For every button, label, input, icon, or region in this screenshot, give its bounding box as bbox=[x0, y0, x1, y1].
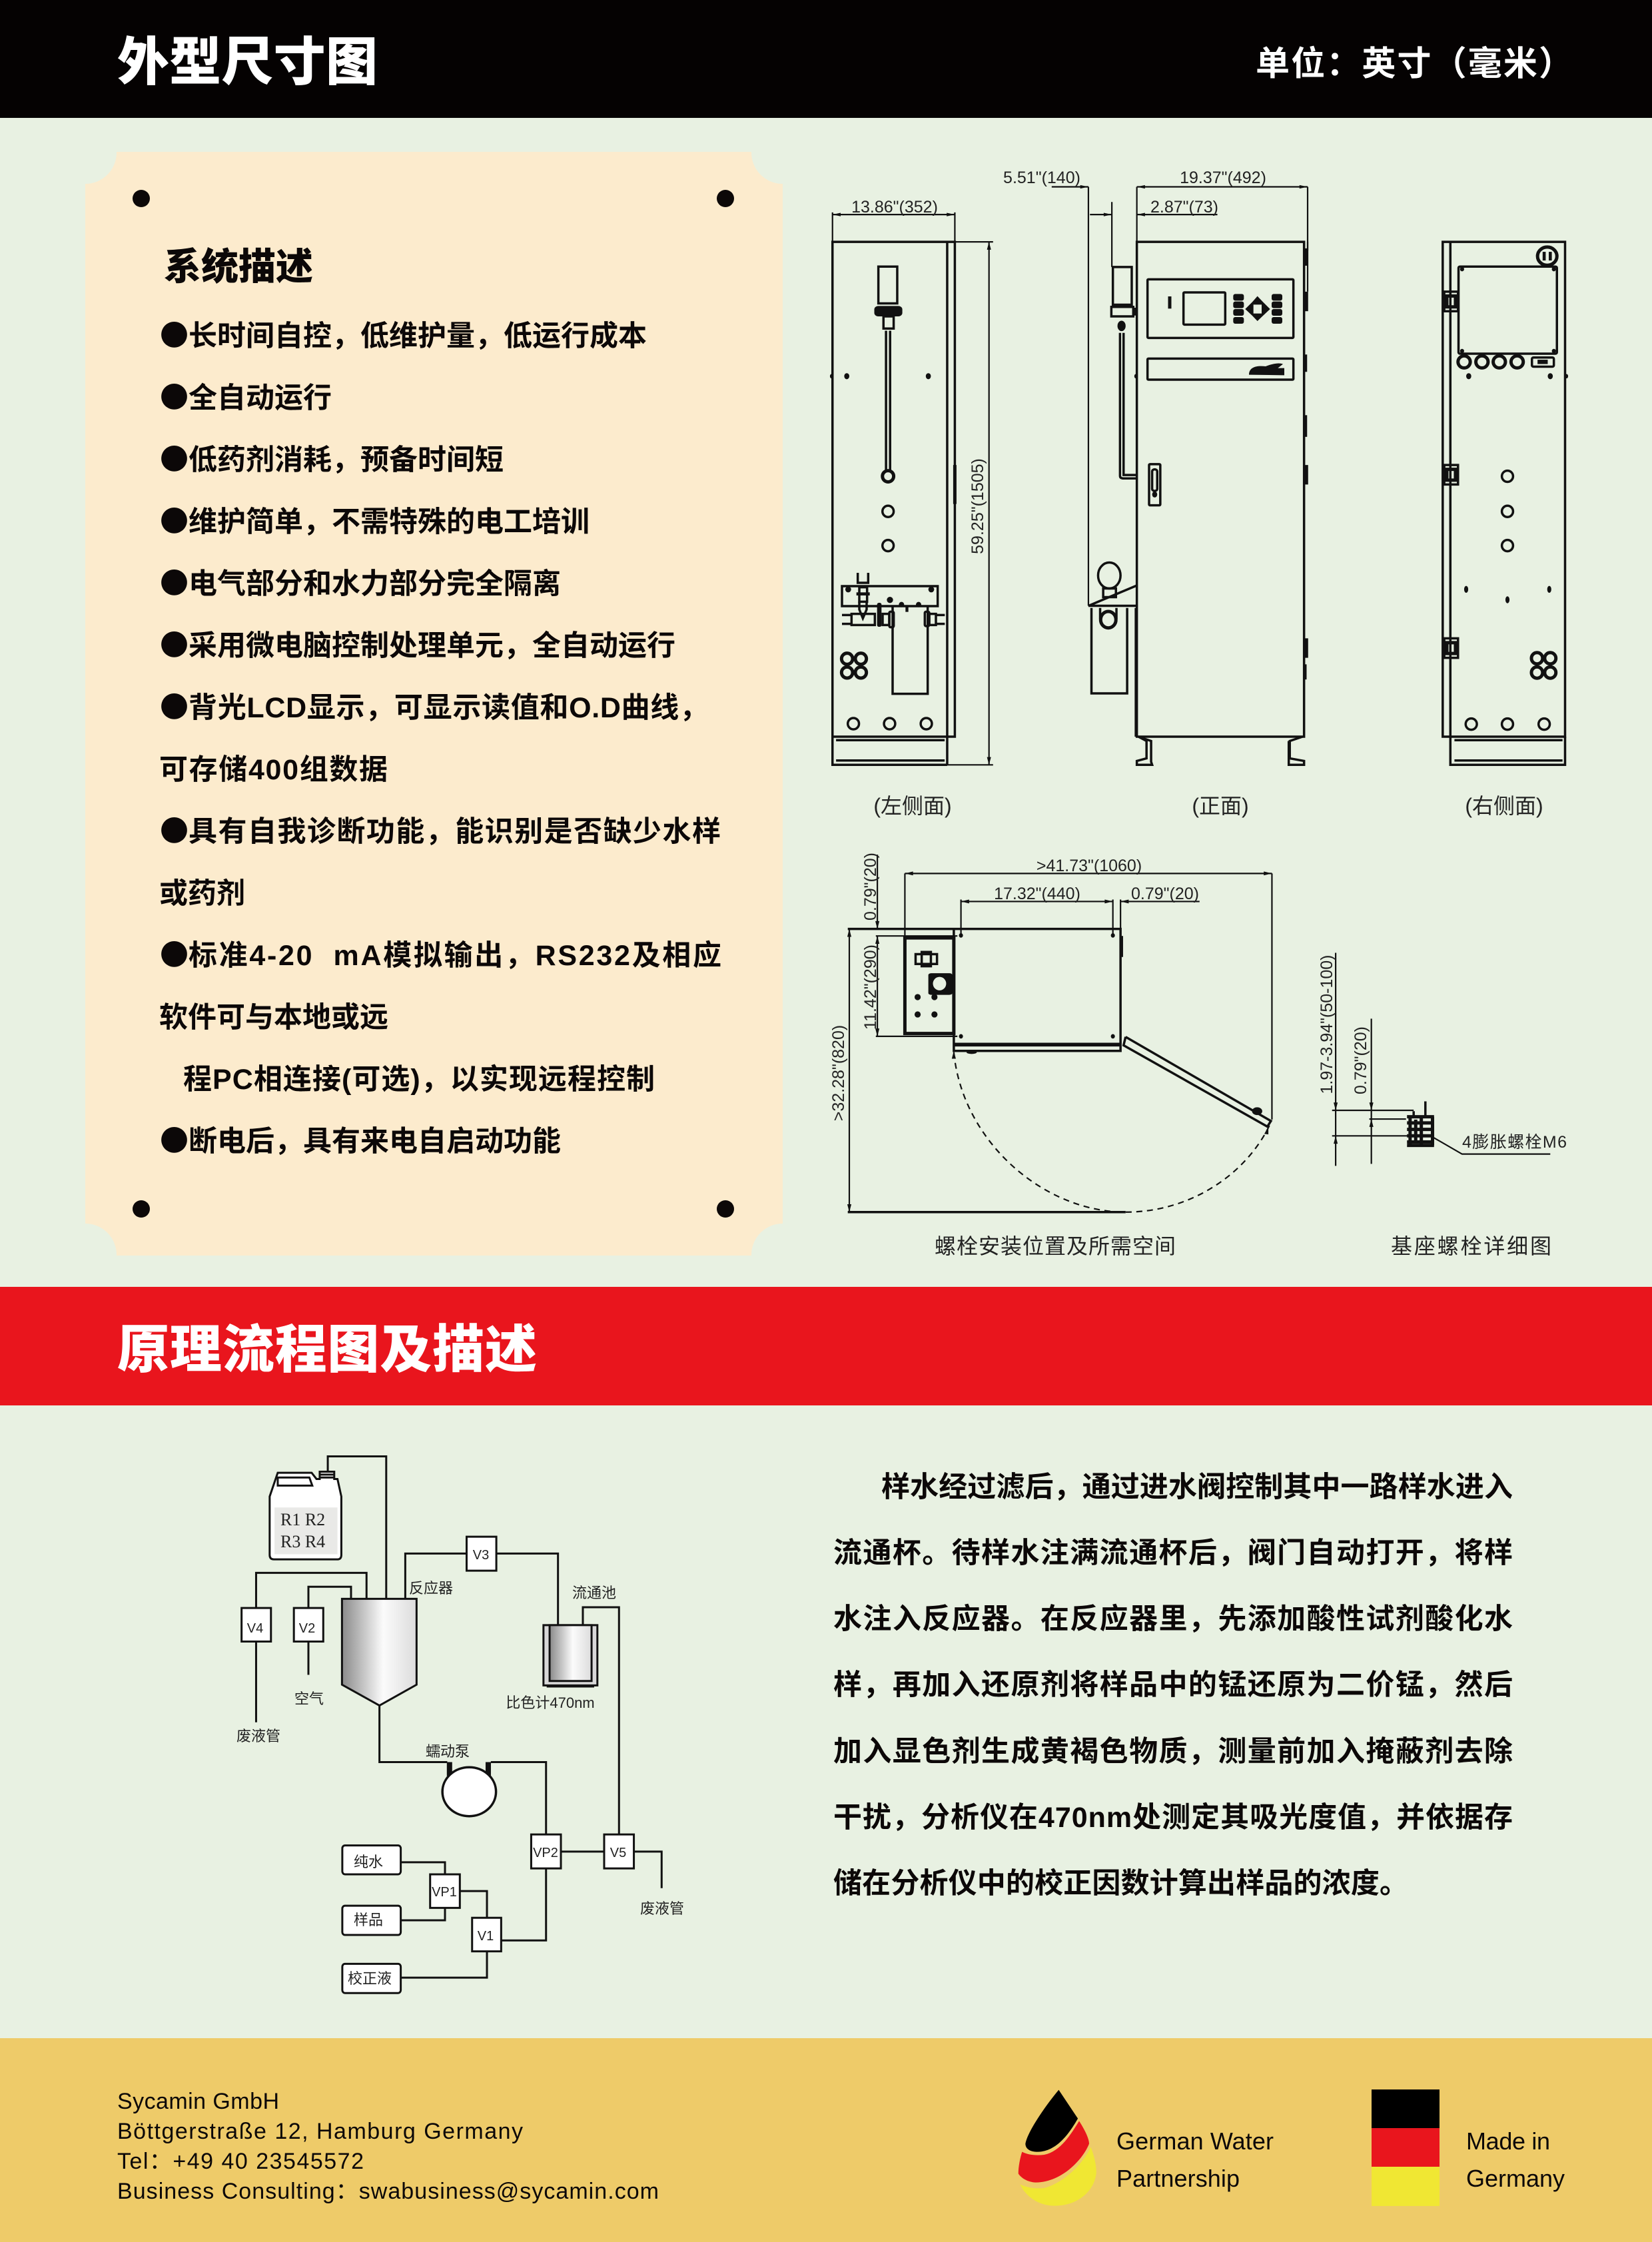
partnership label bbox=[1116, 2127, 1274, 2192]
component labels: 流通池 bbox=[572, 1585, 616, 1601]
caption: left view: (左侧面) bbox=[873, 794, 952, 818]
component labels: 空气 bbox=[294, 1690, 324, 1707]
valve labels: V1 bbox=[478, 1929, 494, 1944]
valve labels: VP1 bbox=[432, 1885, 457, 1900]
principle description text: 样，再加入还原剂将样品中的锰还原为二价锰，然后 bbox=[833, 1669, 1513, 1701]
panel heading: 系统描述 bbox=[164, 246, 313, 288]
drawing: front view bbox=[1003, 169, 1308, 818]
feature list: 全自动运行 bbox=[189, 382, 332, 414]
principle description text bbox=[833, 1471, 1513, 1900]
feature list: 维护简单，不需特殊的电工培训 bbox=[189, 506, 590, 538]
principle description text: 加入显色剂生成黄褐色物质，测量前加入掩蔽剂去除 bbox=[833, 1736, 1513, 1768]
caption: right view: (右侧面) bbox=[1465, 794, 1543, 818]
component labels: 纯水 bbox=[354, 1854, 383, 1870]
feature list: 长时间自控，低维护量，低运行成本 bbox=[189, 320, 647, 352]
feature list: ● bbox=[160, 437, 189, 478]
icon: reactor tank bbox=[342, 1599, 416, 1706]
component labels: 废液管 bbox=[640, 1900, 684, 1917]
component labels bbox=[236, 1580, 684, 1987]
feature list: 程PC相连接(可选)，以实现远程控制 bbox=[183, 1064, 655, 1096]
feature list: ● bbox=[160, 933, 189, 974]
company contact details: Tel：+49 40 23545572 bbox=[117, 2149, 364, 2174]
partnership label: Partnership bbox=[1116, 2165, 1240, 2192]
made in Germany label: Made in bbox=[1466, 2127, 1550, 2155]
feature list: 采用微电脑控制处理单元，全自动运行 bbox=[189, 630, 675, 662]
footer bbox=[0, 2038, 1652, 2242]
feature list: 标准4-20 mA模拟输出，RS232及相应 bbox=[189, 940, 721, 972]
valve labels: VP2 bbox=[533, 1846, 558, 1860]
component labels: 反应器 bbox=[409, 1580, 453, 1597]
icon: flow cell bbox=[544, 1625, 598, 1686]
company contact details bbox=[117, 2089, 659, 2204]
dimension: 0.79 horizontal: 0.79"(20) bbox=[1131, 885, 1199, 903]
dimension: 19.37: 19.37"(492) bbox=[1180, 169, 1266, 187]
feature list: ● bbox=[160, 375, 189, 416]
valve labels: V3 bbox=[473, 1548, 489, 1563]
dimension: height: 59.25"(1505) bbox=[969, 458, 987, 554]
principle description text: 储在分析仪中的校正因数计算出样品的浓度。 bbox=[833, 1868, 1408, 1900]
dimension: 17.32: 17.32"(440) bbox=[994, 885, 1080, 903]
component labels: 样品 bbox=[354, 1912, 383, 1928]
component labels: 校正液 bbox=[348, 1970, 392, 1987]
caption: bolt positions: 螺栓安装位置及所需空间 bbox=[935, 1234, 1176, 1258]
feature list: ● bbox=[160, 809, 189, 850]
component labels: 蠕动泵 bbox=[426, 1743, 470, 1760]
feature list: 背光LCD显示，可显示读值和O.D曲线， bbox=[189, 692, 708, 724]
company contact details: Business Consulting：swabusiness@sycamin.com bbox=[117, 2179, 659, 2204]
canister labels: R1 R2 bbox=[280, 1510, 325, 1529]
drawing: bolt positions and required space bbox=[829, 853, 1272, 1258]
section title: 原理流程图及描述 bbox=[117, 1320, 537, 1379]
drawing: right side view bbox=[1443, 242, 1568, 818]
dimension: 32.28: >32.28"(820) bbox=[829, 1025, 848, 1121]
feature list: 低药剂消耗，预备时间短 bbox=[189, 444, 504, 476]
caption: front view: (正面) bbox=[1192, 794, 1249, 818]
dimension: 11.42: 11.42"(290) bbox=[861, 944, 880, 1030]
valve labels: V4 bbox=[247, 1621, 263, 1636]
icon: water drop logo bbox=[1019, 2090, 1096, 2206]
dimension: 0.79 detail: 0.79"(20) bbox=[1352, 1026, 1370, 1094]
manifold and sample cup bbox=[841, 573, 945, 694]
dimension: 5.51: 5.51"(140) bbox=[1003, 169, 1080, 187]
feature list: ● bbox=[160, 313, 189, 354]
valves bbox=[242, 1537, 634, 1993]
company contact details: Böttgerstraße 12, Hamburg Germany bbox=[117, 2119, 523, 2144]
feature list: 可存储400组数据 bbox=[159, 754, 388, 786]
header band: dimensions bbox=[0, 0, 1652, 118]
made in Germany label: Germany bbox=[1466, 2165, 1565, 2192]
feature list: ● bbox=[160, 623, 189, 664]
principle description text: 水注入反应器。在反应器里，先添加酸性试剂酸化水 bbox=[833, 1603, 1513, 1635]
flow chart bbox=[236, 1456, 684, 1993]
feature list: 软件可与本地或远 bbox=[159, 1002, 388, 1034]
principle description text: 干扰，分析仪在470nm处测定其吸光度值，并依据存 bbox=[833, 1802, 1513, 1834]
icon: German flag bbox=[1372, 2089, 1440, 2206]
valve labels bbox=[247, 1548, 626, 1944]
flow chart: R3 R4 bbox=[280, 1532, 325, 1551]
icon: peristaltic pump bbox=[442, 1762, 496, 1816]
drawing: left side view bbox=[830, 198, 993, 818]
company contact details: Sycamin GmbH bbox=[117, 2089, 279, 2114]
feature list bbox=[159, 313, 721, 1160]
feature list: 具有自我诊断功能，能识别是否缺少水样 bbox=[189, 816, 721, 848]
feature list: ● bbox=[160, 499, 189, 540]
principle description text: 流通杯。待样水注满流通杯后，阀门自动打开，将样 bbox=[833, 1537, 1513, 1569]
drawing: base bolt detail bbox=[1318, 952, 1567, 1258]
section band: principle and flow chart bbox=[0, 1287, 1652, 1405]
feature list: ● bbox=[160, 685, 189, 726]
component labels: 比色计470nm bbox=[506, 1694, 595, 1711]
feature list: 断电后，具有来电自启动功能 bbox=[189, 1126, 561, 1158]
component labels: 废液管 bbox=[236, 1728, 280, 1744]
dimension: width: 13.86"(352) bbox=[851, 198, 938, 216]
valve labels: V2 bbox=[299, 1621, 315, 1636]
icon: reagent canister bbox=[270, 1471, 341, 1559]
caption: base bolt detail: 基座螺栓详细图 bbox=[1391, 1234, 1551, 1258]
control panel with keypad bbox=[1148, 279, 1294, 380]
feature list: 或药剂 bbox=[159, 878, 245, 910]
title: outline dimensions: 外型尺寸图 bbox=[117, 33, 378, 91]
dimension: 1.97-3.94: 1.97-3.94"(50-100) bbox=[1318, 954, 1336, 1094]
made in Germany label bbox=[1466, 2127, 1565, 2192]
valve labels: V5 bbox=[610, 1846, 626, 1860]
unit note: 单位：英寸（毫米） bbox=[1256, 45, 1573, 83]
feature list: ● bbox=[160, 1118, 189, 1160]
dimension: 41.73: >41.73"(1060) bbox=[1036, 857, 1142, 875]
panel: system description bbox=[85, 152, 783, 1256]
feature list: ● bbox=[160, 561, 189, 602]
bolt label: 4膨胀螺栓M6 bbox=[1462, 1133, 1567, 1152]
dimension: 2.87: 2.87"(73) bbox=[1150, 198, 1218, 216]
dimension: 0.79 vertical: 0.79"(20) bbox=[861, 853, 880, 921]
partnership label: German Water bbox=[1116, 2127, 1274, 2155]
feature list: 电气部分和水力部分完全隔离 bbox=[189, 568, 561, 600]
principle description text: 样水经过滤后，通过进水阀控制其中一路样水进入 bbox=[881, 1471, 1513, 1503]
